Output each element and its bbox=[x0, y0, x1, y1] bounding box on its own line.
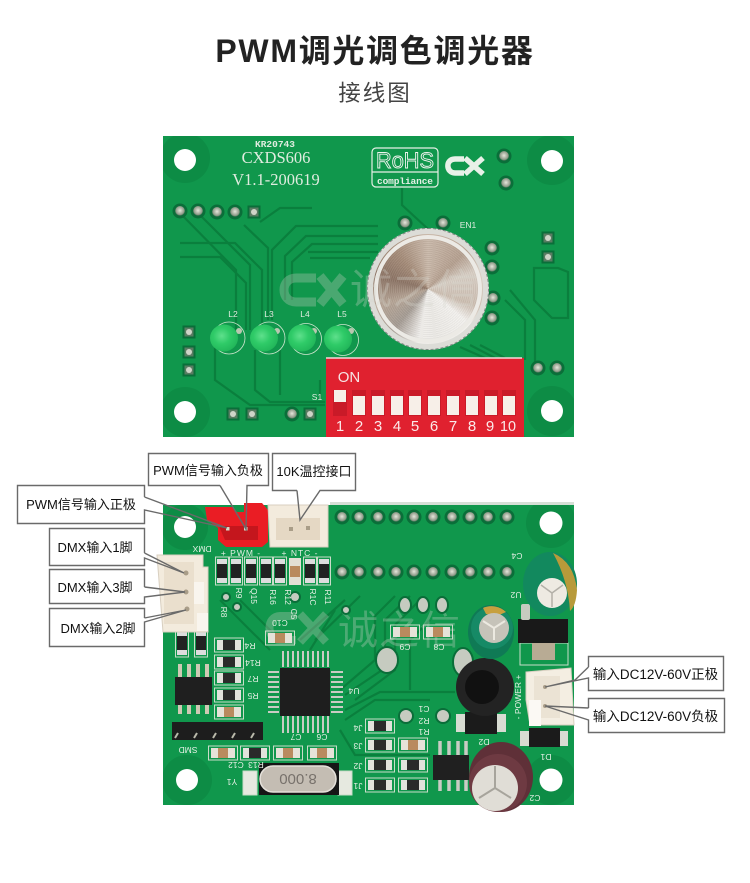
icon: CX logo bbox=[448, 158, 483, 174]
icon: rotary knob bbox=[367, 228, 489, 350]
silkscreen labels: C1 bbox=[418, 704, 429, 714]
callout: DMX pin 1 bbox=[50, 528, 184, 573]
connector: power white bbox=[526, 668, 574, 726]
silkscreen labels: R1 bbox=[418, 727, 429, 737]
crystal oscillator: 8.000 bbox=[279, 770, 317, 787]
crystal oscillator bbox=[243, 763, 352, 795]
top edge highlight bbox=[330, 502, 574, 505]
watermark on bottom board bbox=[270, 609, 461, 653]
chip: QFP microcontroller bbox=[268, 651, 343, 733]
silkscreen model text: V1.1-200619 bbox=[232, 170, 320, 189]
DIP switch: 7 bbox=[449, 418, 457, 435]
callout: DMX pin 2: DMX输入2脚 bbox=[60, 621, 136, 636]
title: PWM调光调色调光器 bbox=[215, 33, 535, 69]
callout: DMX pin 3: DMX输入3脚 bbox=[57, 580, 133, 595]
silkscreen labels: C7 bbox=[290, 732, 301, 742]
silkscreen labels: J2 bbox=[353, 761, 362, 771]
DIP switch: 2 bbox=[355, 418, 363, 435]
silkscreen labels: Q15 bbox=[249, 588, 259, 604]
corner pads bbox=[162, 498, 576, 805]
silkscreen labels: R16 bbox=[268, 589, 278, 605]
DIP switch: 8 bbox=[468, 418, 476, 435]
silkscreen labels: DMX bbox=[192, 544, 211, 554]
silkscreen labels: R9 bbox=[234, 588, 244, 599]
copper traces bbox=[180, 188, 568, 405]
LED indicators bbox=[210, 322, 358, 356]
silkscreen labels: SMD bbox=[179, 745, 197, 755]
silkscreen model text: S1 bbox=[312, 392, 322, 402]
DIP switch: ON bbox=[338, 369, 360, 386]
black pin header SWD bbox=[172, 722, 263, 740]
capacitor C2 bbox=[469, 742, 533, 812]
chip: left SOIC bbox=[175, 664, 212, 714]
icon: RoHS compliance mark: compliance bbox=[377, 176, 433, 187]
callout: DC positive input: 输入DC12V-60V正极 bbox=[593, 667, 719, 682]
silkscreen model text: L5 bbox=[337, 309, 347, 319]
silkscreen labels: C8 bbox=[433, 642, 444, 652]
DIP switch: 5 bbox=[411, 418, 419, 435]
mounting holes bbox=[174, 149, 563, 423]
callout: PWM positive input bbox=[18, 486, 227, 528]
silkscreen labels: R12 bbox=[283, 589, 293, 605]
silkscreen labels: U2 bbox=[510, 590, 521, 600]
silkscreen labels: R11 bbox=[323, 590, 333, 605]
silkscreen labels: J4 bbox=[353, 723, 362, 733]
silkscreen model text: CXDS606 bbox=[242, 148, 310, 167]
connector: NTC white bbox=[268, 505, 328, 547]
DIP switch bbox=[326, 358, 524, 437]
watermark on top board: 诚之信 bbox=[350, 266, 479, 313]
DIP switch: 3 bbox=[374, 418, 382, 435]
callout: PWM negative input: PWM信号输入负极 bbox=[153, 463, 263, 478]
SMD resistors and capacitors bbox=[176, 625, 452, 792]
board base bbox=[163, 136, 574, 437]
subtitle: 接线图 bbox=[338, 81, 412, 106]
silkscreen model text: KR20743 bbox=[255, 139, 295, 150]
callout: DMX pin 2 bbox=[50, 608, 186, 646]
silkscreen labels: R5 bbox=[247, 691, 258, 701]
DIP switch: 10 bbox=[500, 418, 516, 435]
silkscreen labels: R2 bbox=[418, 716, 429, 726]
silkscreen labels: J3 bbox=[353, 741, 362, 751]
silkscreen labels: R1C bbox=[308, 588, 318, 606]
silkscreen labels: R13 bbox=[248, 760, 264, 770]
silkscreen labels: D1 bbox=[540, 752, 551, 762]
mounting holes bbox=[174, 512, 562, 792]
copper traces bbox=[220, 596, 455, 755]
callout: PWM positive input: PWM信号输入正极 bbox=[26, 497, 136, 512]
silkscreen model text: EN1 bbox=[460, 220, 477, 230]
corner mounting pads bbox=[160, 133, 577, 437]
DIP switch: 4 bbox=[393, 418, 401, 435]
DIP switch: 9 bbox=[486, 418, 494, 435]
regulator U2 bbox=[518, 604, 568, 665]
silkscreen labels: + PWM - bbox=[221, 548, 261, 558]
callout: 10K NTC interface: 10K温控接口 bbox=[276, 464, 352, 479]
silkscreen labels: C4 bbox=[511, 551, 522, 561]
chip: right SOIC bbox=[433, 741, 469, 791]
panel: top circuit board photo bbox=[163, 136, 574, 437]
silver solder pads bbox=[222, 592, 473, 723]
icon: RoHS compliance mark: RoHS bbox=[376, 148, 434, 173]
callout: DMX pin 1: DMX输入1脚 bbox=[57, 540, 133, 555]
capacitor C4 bbox=[523, 552, 577, 616]
icon: RoHS compliance mark bbox=[372, 148, 438, 187]
silkscreen model text: L4 bbox=[300, 309, 310, 319]
callout: 10K NTC interface bbox=[272, 454, 356, 520]
silkscreen labels: C10 bbox=[272, 618, 288, 628]
callout: DC positive input bbox=[545, 656, 724, 690]
resistor row bbox=[216, 557, 330, 585]
silkscreen labels: C12 bbox=[228, 760, 244, 770]
silkscreen labels: C5 bbox=[289, 609, 299, 620]
silkscreen labels: R4 bbox=[244, 641, 255, 651]
callout: DC negative input: 输入DC12V-60V负极 bbox=[593, 709, 719, 724]
watermark on top board bbox=[284, 266, 479, 313]
silkscreen labels: C2 bbox=[529, 793, 540, 803]
silkscreen labels: J1 bbox=[353, 781, 362, 791]
board base bbox=[163, 505, 574, 805]
solder pins bbox=[172, 148, 564, 422]
silkscreen model text bbox=[228, 139, 477, 402]
capacitor C3 bbox=[468, 605, 514, 659]
diodes bbox=[456, 712, 568, 747]
silkscreen model text: L2 bbox=[228, 309, 238, 319]
silkscreen labels: R8 bbox=[219, 607, 229, 618]
panel: bottom circuit board photo bbox=[156, 268, 577, 812]
silkscreen labels: D2 bbox=[478, 737, 489, 747]
connector: DMX white bbox=[157, 555, 208, 632]
silkscreen labels: C6 bbox=[316, 732, 327, 742]
inductor bbox=[456, 658, 514, 716]
callout: PWM negative input bbox=[148, 454, 268, 529]
connector: PWM red bbox=[205, 503, 268, 547]
silkscreen labels bbox=[179, 544, 551, 803]
silkscreen labels: C9 bbox=[399, 642, 410, 652]
DIP switch: 6 bbox=[430, 418, 438, 435]
silkscreen model text: L3 bbox=[264, 309, 274, 319]
watermark on bottom board: 诚之信 bbox=[338, 609, 461, 653]
callout: DC negative input bbox=[545, 698, 724, 732]
silkscreen labels: R14 bbox=[245, 658, 261, 668]
silkscreen labels: + NTC - bbox=[282, 548, 318, 558]
silkscreen labels: U4 bbox=[348, 686, 359, 696]
silkscreen labels: R7 bbox=[247, 674, 258, 684]
silkscreen labels: Y1 bbox=[227, 777, 237, 787]
silkscreen labels: - POWER + bbox=[513, 675, 523, 719]
header pin rows bbox=[334, 510, 514, 580]
DIP switch: 1 bbox=[336, 418, 344, 435]
callout: DMX pin 3 bbox=[50, 570, 185, 604]
